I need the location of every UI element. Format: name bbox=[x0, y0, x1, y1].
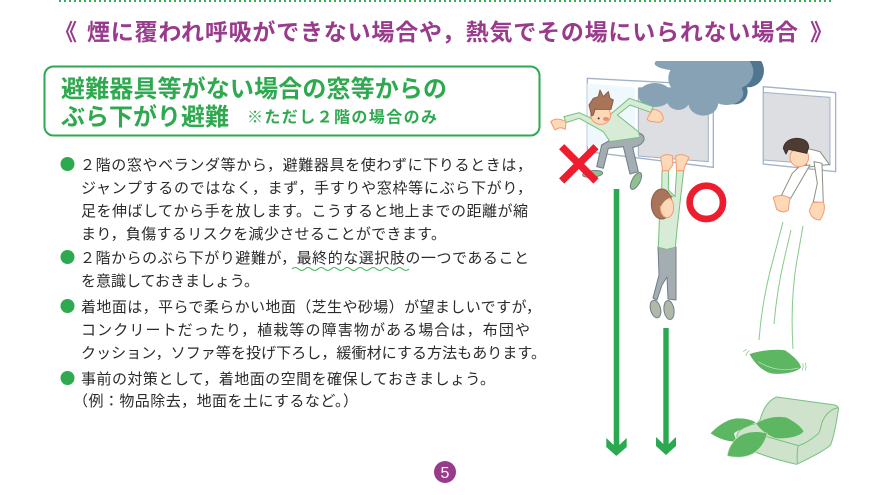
heading text: ぶら下がり避難 bbox=[61, 103, 229, 131]
illustration: falling cushion bbox=[743, 349, 806, 374]
text block: bullet 2 bbox=[60, 250, 529, 290]
page number: 5 bbox=[441, 465, 450, 482]
text block: bullet 3: 着地面は，平らで柔らかい地面（芝生や砂場）が望ましいですが， bbox=[81, 299, 541, 316]
title: 》 bbox=[810, 19, 833, 45]
motion lines bbox=[759, 222, 803, 349]
title: 煙に覆われ呼吸ができない場合や，熱気でその場にいられない場合 bbox=[87, 19, 798, 45]
heading text: 避難器具等がない場合の窓等からの bbox=[61, 75, 447, 103]
text block: bullet 1: ジャンプするのではなく，まず，手すりや窓枠等にぶら下がり， bbox=[81, 179, 532, 197]
icon: red circle bbox=[690, 186, 723, 219]
illustration: person jumping (wrong) bbox=[551, 90, 663, 191]
heading text bbox=[61, 75, 447, 131]
page number bbox=[434, 461, 456, 483]
panel: heading box bbox=[44, 66, 540, 136]
text block: bullet 4 bbox=[60, 371, 495, 410]
text block: bullet 3: クッション，ソファ等を投げ下ろし，緩衝材にする方法もあります。 bbox=[81, 344, 546, 362]
heading text: ※ただし２階の場合のみ bbox=[247, 108, 437, 126]
text block: bullet 4: （例：物品除去，地面を土にするなど。） bbox=[73, 393, 358, 410]
illustration: left window with smoke bbox=[587, 53, 764, 167]
cushion: left bbox=[711, 418, 756, 442]
text block: bullet 1 bbox=[60, 156, 532, 243]
text block: bullet 3: コンクリートだったり，植栽等の障害物がある場合は，布団や bbox=[81, 321, 530, 339]
illustration: man lowering cushion bbox=[773, 138, 829, 220]
text block: bullet 3 bbox=[60, 299, 546, 362]
text block: bullet 2: を意識しておきましょう。 bbox=[81, 273, 259, 290]
text block: bullet 2: ２階からのぶら下がり避難が，最終的な選択肢の一つであること bbox=[80, 250, 529, 267]
illustration: person hanging (correct) bbox=[648, 155, 689, 320]
text block: bullet 1: まり，負傷するリスクを減少させることができます。 bbox=[81, 226, 446, 243]
icon: red cross bbox=[562, 147, 596, 181]
arrow: right down arrow bbox=[656, 328, 676, 455]
cushion: right bbox=[756, 417, 804, 439]
text block: bullet 4: 事前の対策として，着地面の空間を確保しておきましょう。 bbox=[81, 371, 495, 388]
illustration: right window bbox=[763, 87, 836, 172]
cushion: front bbox=[727, 432, 767, 457]
arrow: left down arrow bbox=[606, 189, 627, 456]
text block: bullet 1: ２階の窓やベランダ等から，避難器具を使わずに下りるときは， bbox=[80, 156, 532, 174]
text block: bullet 1: 足を伸ばしてから手を放します。こうすると地上までの距離が縮 bbox=[81, 203, 528, 220]
icon: smoke cloud bbox=[638, 61, 764, 116]
title: 《 bbox=[54, 19, 77, 45]
illustration: sofa with cushions bbox=[711, 397, 838, 464]
